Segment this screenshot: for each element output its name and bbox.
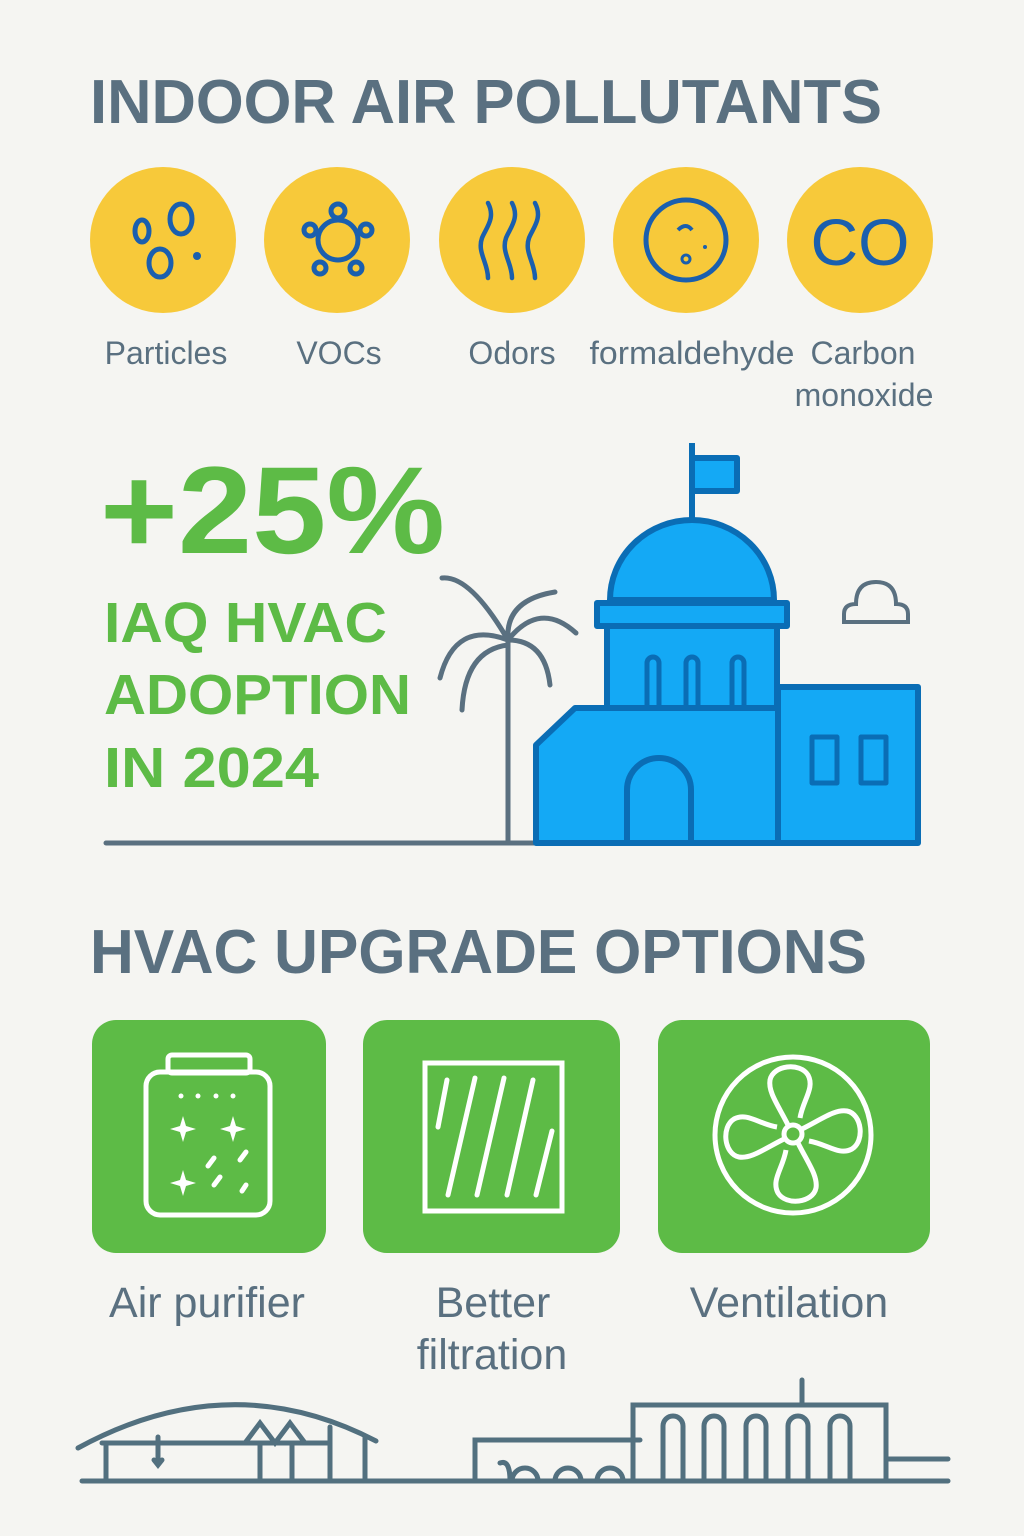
stat: +25%: +25%	[100, 442, 445, 580]
icon: cloud	[844, 582, 908, 622]
pollutant labels: VOCs	[296, 335, 382, 371]
icon: VOCs	[264, 167, 410, 313]
pollutant labels: formaldehyde	[590, 335, 794, 371]
option labels: Ventilation	[690, 1279, 888, 1327]
card: better filtration	[363, 1020, 620, 1253]
ground line	[106, 840, 535, 846]
card: ventilation	[658, 1020, 930, 1253]
title: HVAC upgrade options: HVAC UPGRADE OPTIONS	[90, 918, 867, 987]
icon: domed building	[536, 443, 918, 843]
icon: palm tree	[440, 578, 576, 843]
title: indoor air pollutants: INDOOR AIR POLLUTANTS	[90, 68, 882, 137]
pollutant labels	[105, 335, 933, 413]
icon: formaldehyde	[613, 167, 759, 313]
pollutant labels: Particles	[105, 335, 227, 371]
icon: CO: CO	[810, 205, 910, 279]
option labels: Better	[436, 1279, 550, 1327]
stat caption: IN 2024	[104, 736, 319, 800]
stat caption: ADOPTION	[104, 663, 411, 727]
option labels	[109, 1279, 888, 1379]
stat caption: IAQ HVAC	[104, 591, 387, 655]
icon: odors	[439, 167, 585, 313]
stat caption	[104, 591, 411, 800]
card: air purifier	[92, 1020, 326, 1253]
pollutant labels: monoxide	[795, 377, 933, 413]
option labels: filtration	[417, 1331, 567, 1379]
bottom skyline illustration	[78, 1380, 948, 1481]
pollutant labels: Odors	[468, 335, 556, 371]
icon: CO	[787, 167, 933, 313]
pollutant icons row	[90, 167, 933, 313]
pollutant labels: Carbon	[811, 335, 915, 371]
icon: particles	[90, 167, 236, 313]
option labels: Air purifier	[109, 1279, 305, 1327]
